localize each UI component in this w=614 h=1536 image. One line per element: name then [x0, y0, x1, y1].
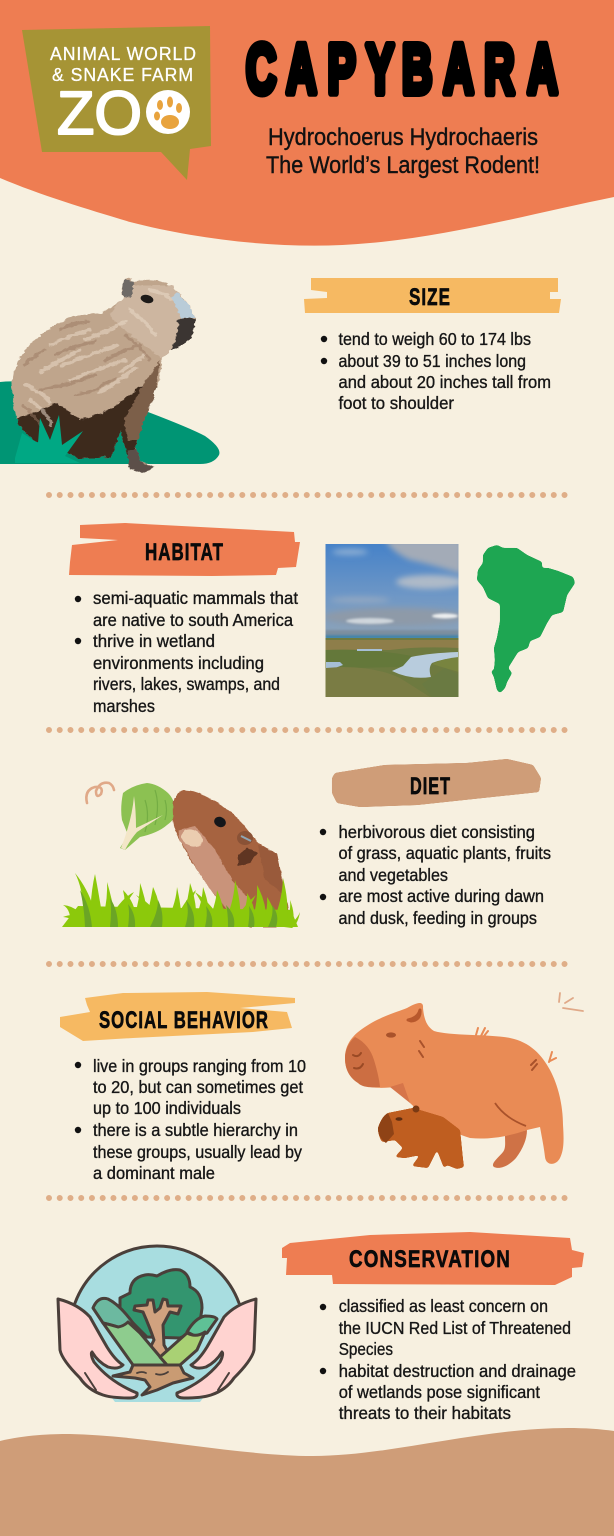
- panel: diet: [62, 759, 551, 928]
- heading: social behavior: SOCIAL BEHAVIOR: [99, 1007, 269, 1034]
- text block: habitat facts: are native to south America: [93, 610, 293, 630]
- text block: size facts: about 39 to 51 inches long: [338, 351, 526, 371]
- text block: social facts: these groups, usually lead by: [93, 1142, 302, 1162]
- text block: diet facts: [320, 822, 551, 928]
- panel: social behavior: [60, 992, 583, 1183]
- heading: size: SIZE: [409, 284, 451, 311]
- title: CAPYBARA: [246, 31, 558, 109]
- text block: size facts: and about 20 inches tall from: [338, 372, 551, 392]
- text block: diet facts: and vegetables: [338, 865, 448, 885]
- text block: social facts: up to 100 individuals: [93, 1098, 241, 1118]
- text block: social facts: there is a subtle hierarchy in: [93, 1120, 298, 1140]
- panel: conservation: [58, 1232, 584, 1423]
- logo: Animal World & Snake Farm Zoo: ANIMAL WORLD: [50, 43, 197, 64]
- heading: habitat: HABITAT: [145, 539, 224, 566]
- subtitle: Hydrochoerus Hydrochaeris: [268, 124, 538, 151]
- heading: social behavior: [60, 992, 295, 1041]
- text block: diet facts: and dusk, feeding in groups: [338, 908, 537, 928]
- panel: size: [0, 278, 561, 476]
- text block: diet facts: are most active during dawn: [338, 886, 544, 906]
- text block: social facts: a dominant male: [93, 1163, 215, 1183]
- heading: habitat: [69, 523, 300, 576]
- illustration: capybara eating lettuce in grass: [62, 783, 300, 928]
- text block: habitat facts: [75, 588, 298, 716]
- subtitle: [266, 124, 540, 179]
- text block: social facts: live in groups ranging from 10: [93, 1056, 306, 1076]
- text block: habitat facts: environments including: [93, 653, 264, 673]
- heading: diet: DIET: [410, 773, 451, 800]
- text block: diet facts: of grass, aquatic plants, fruits: [338, 843, 551, 863]
- text block: size facts: tend to weigh 60 to 174 lbs: [338, 329, 531, 349]
- heading: conservation: CONSERVATION: [349, 1246, 511, 1273]
- illustration: adult and baby capybara: [345, 993, 583, 1169]
- text block: conservation facts: threats to their habitats: [339, 1403, 511, 1423]
- text block: social facts: to 20, but can sometimes get: [93, 1077, 303, 1097]
- heading: conservation: [282, 1232, 584, 1285]
- text block: conservation facts: Species: [339, 1339, 393, 1359]
- illustration: capybara on green mound: [0, 278, 219, 476]
- panel: habitat: [69, 523, 575, 716]
- logo: Animal World & Snake Farm Zoo: ZO: [57, 79, 142, 147]
- text block: conservation facts: [320, 1296, 576, 1423]
- text block: conservation facts: the IUCN Red List of Threatened: [339, 1318, 571, 1338]
- text block: size facts: [321, 329, 551, 413]
- subtitle: The World’s Largest Rodent!: [266, 152, 540, 179]
- text block: social facts: [75, 1056, 306, 1183]
- text block: habitat facts: semi-aquatic mammals that: [93, 588, 298, 608]
- logo: Animal World & Snake Farm Zoo: & SNAKE FARM: [52, 64, 194, 85]
- text block: conservation facts: classified as least concern on: [339, 1296, 548, 1316]
- text block: habitat facts: thrive in wetland: [93, 631, 215, 651]
- text block: size facts: foot to shoulder: [338, 393, 454, 413]
- text block: conservation facts: habitat destruction and drainage: [339, 1361, 576, 1381]
- logo: Animal World & Snake Farm Zoo: [22, 26, 211, 180]
- image: wetland landscape: [326, 544, 458, 697]
- text block: conservation facts: of wetlands pose significant: [339, 1382, 540, 1402]
- text block: habitat facts: marshes: [93, 696, 155, 716]
- heading: diet: [332, 759, 541, 807]
- text block: diet facts: herbivorous diet consisting: [338, 822, 535, 842]
- icon: South America map: [477, 545, 575, 693]
- text block: habitat facts: rivers, lakes, swamps, and: [93, 674, 280, 694]
- footer wave: [0, 1428, 614, 1536]
- icon: hands holding tree and hills: [58, 1246, 256, 1402]
- header wave: [0, 0, 614, 246]
- heading: size: [304, 278, 561, 313]
